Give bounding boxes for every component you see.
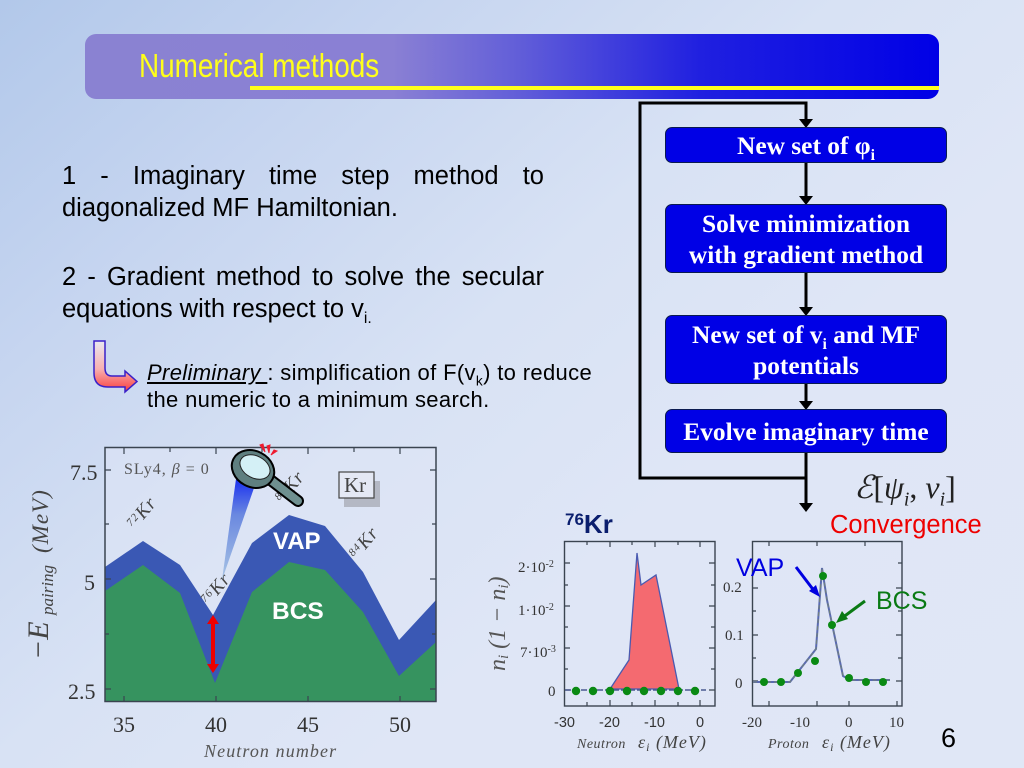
chart: pairing energy vs neutron number: 80 <box>272 485 290 503</box>
chart: pairing energy vs neutron number: 50 <box>389 712 411 737</box>
title bar <box>85 34 939 99</box>
chart: neutron occupancy: ε <box>638 732 646 752</box>
chart: pairing energy vs neutron number: Neutron number <box>203 741 337 761</box>
label: BCS green: BCS <box>876 587 927 615</box>
flow box: solve minimization: Solve minimization <box>702 210 910 238</box>
text block: method 2: equations with respect to vi. <box>62 295 372 327</box>
text block: method 2: 2 - Gradient method to solve the secular <box>62 263 544 291</box>
text block: method 1: diagonalized MF Hamiltonian. <box>62 194 398 222</box>
chart: neutron occupancy: -3 <box>548 644 556 655</box>
chart: neutron occupancy <box>485 540 716 754</box>
chart: neutron occupancy: i <box>496 655 512 659</box>
chart: pairing energy vs neutron number: 84 <box>346 541 364 559</box>
text block: method 2 <box>62 263 544 327</box>
chart: neutron occupancy: Neutron <box>576 737 626 752</box>
chart: proton occupancy: 10 <box>889 715 904 731</box>
arrow: BCS pointer <box>836 601 865 623</box>
chart: pairing energy vs neutron number: Kr <box>204 569 235 600</box>
flow box: new set of v and MF potentials: potentials <box>753 352 859 380</box>
chart: pairing energy vs neutron number: 76 <box>198 587 216 605</box>
magnifier beam <box>222 479 254 580</box>
chart: proton occupancy: Proton <box>767 737 809 752</box>
heading: 76Kr: 76Kr <box>565 509 613 539</box>
chart: neutron occupancy: i <box>646 740 650 754</box>
flow box: new set of phi: New set of φi <box>737 132 875 164</box>
chart: proton occupancy: -20 <box>742 715 762 731</box>
text block: preliminary note: the numeric to a minimum search. <box>147 387 490 412</box>
chart: proton occupancy: 0.2 <box>723 580 742 596</box>
arrow: VAP pointer <box>796 567 820 597</box>
chart: neutron occupancy: i <box>496 584 512 589</box>
flow box: new set of v and MF potentials: New set of vi and MF <box>692 321 920 353</box>
label: BCS: BCS <box>272 598 324 625</box>
label: Convergence: Convergence <box>830 511 982 539</box>
chart: neutron occupancy: (1 − n <box>485 589 511 655</box>
chart: neutron occupancy: 1·10 <box>518 603 546 619</box>
chart: pairing energy vs neutron number: 35 <box>113 712 135 737</box>
chart: neutron occupancy: 2·10 <box>518 560 546 576</box>
chart: neutron occupancy: n <box>485 659 511 671</box>
chart: proton occupancy: 0.1 <box>725 628 744 644</box>
VAP area <box>105 515 436 702</box>
text block: preliminary note: Preliminary : simplification of F(vk) to reduce <box>147 360 592 388</box>
chart: proton occupancy: (MeV) <box>834 732 891 753</box>
title: Numerical methods <box>139 47 379 84</box>
flow box: solve minimization <box>665 204 947 273</box>
flow box: evolve imaginary time <box>665 409 947 453</box>
chart: proton occupancy: 0 <box>845 715 852 731</box>
flow box: new set of v and MF potentials <box>665 315 947 384</box>
text block: preliminary note <box>147 360 592 412</box>
chart: pairing energy vs neutron number: 72 <box>124 511 142 529</box>
chart: pairing energy vs neutron number: 40 <box>205 712 227 737</box>
flow box: evolve imaginary time: Evolve imaginary time <box>683 418 929 446</box>
chart: pairing energy vs neutron number: 2.5 <box>68 679 96 704</box>
chart: pairing energy vs neutron number: pairing <box>38 565 57 616</box>
chart: neutron occupancy: 7·10 <box>520 645 548 661</box>
page number: 6 <box>941 723 956 753</box>
chart: neutron occupancy: -20 <box>599 715 620 731</box>
chart: proton occupancy: 0 <box>735 676 742 692</box>
chart: pairing energy vs neutron number: 7.5 <box>70 460 98 485</box>
chart: pairing energy vs neutron number: 5 <box>84 570 95 595</box>
chart: proton occupancy: ε <box>822 732 830 752</box>
legend: Kr: Kr <box>344 473 366 497</box>
chart: pairing energy vs neutron number: Kr <box>278 467 309 498</box>
chart: pairing energy vs neutron number: SLy4, β = 0 <box>124 461 210 478</box>
label: VAP: VAP <box>273 528 321 555</box>
flow box: new set of phi <box>665 127 947 163</box>
legend: Kr <box>339 472 380 507</box>
chart: pairing energy vs neutron number: −E <box>22 621 55 660</box>
text block: method 1: 1 - Imaginary time step method to <box>62 162 544 190</box>
BCS area <box>105 562 436 702</box>
chart: pairing energy vs neutron number <box>22 443 437 761</box>
chart: pairing energy vs neutron number: Kr <box>352 523 383 554</box>
chart: neutron occupancy: 0 <box>696 715 704 731</box>
icon: magnifying glass <box>225 443 298 501</box>
chart: neutron occupancy: -10 <box>644 715 665 731</box>
chart: neutron occupancy: 0 <box>548 684 556 700</box>
chart: pairing energy vs neutron number: Kr <box>130 493 161 524</box>
title underline <box>250 86 939 90</box>
chart: neutron occupancy: (MeV) <box>650 732 707 753</box>
flow box: solve minimization: with gradient method <box>689 241 923 269</box>
chart: neutron occupancy: -30 <box>554 715 575 731</box>
text block: method 1 <box>62 162 544 222</box>
chart: pairing energy vs neutron number: (MeV) <box>28 489 53 553</box>
red double arrow <box>207 615 219 673</box>
chart: proton occupancy: -10 <box>790 715 810 731</box>
chart: neutron occupancy: -2 <box>546 602 554 613</box>
label: VAP blue: VAP <box>736 554 784 582</box>
chart: pairing energy vs neutron number: 45 <box>297 712 319 737</box>
chart: neutron occupancy: -2 <box>546 559 554 570</box>
chart: neutron occupancy: ) <box>485 576 511 586</box>
chart: proton occupancy: i <box>830 740 834 754</box>
formula: ℰ[ψi, vi] <box>854 469 956 510</box>
